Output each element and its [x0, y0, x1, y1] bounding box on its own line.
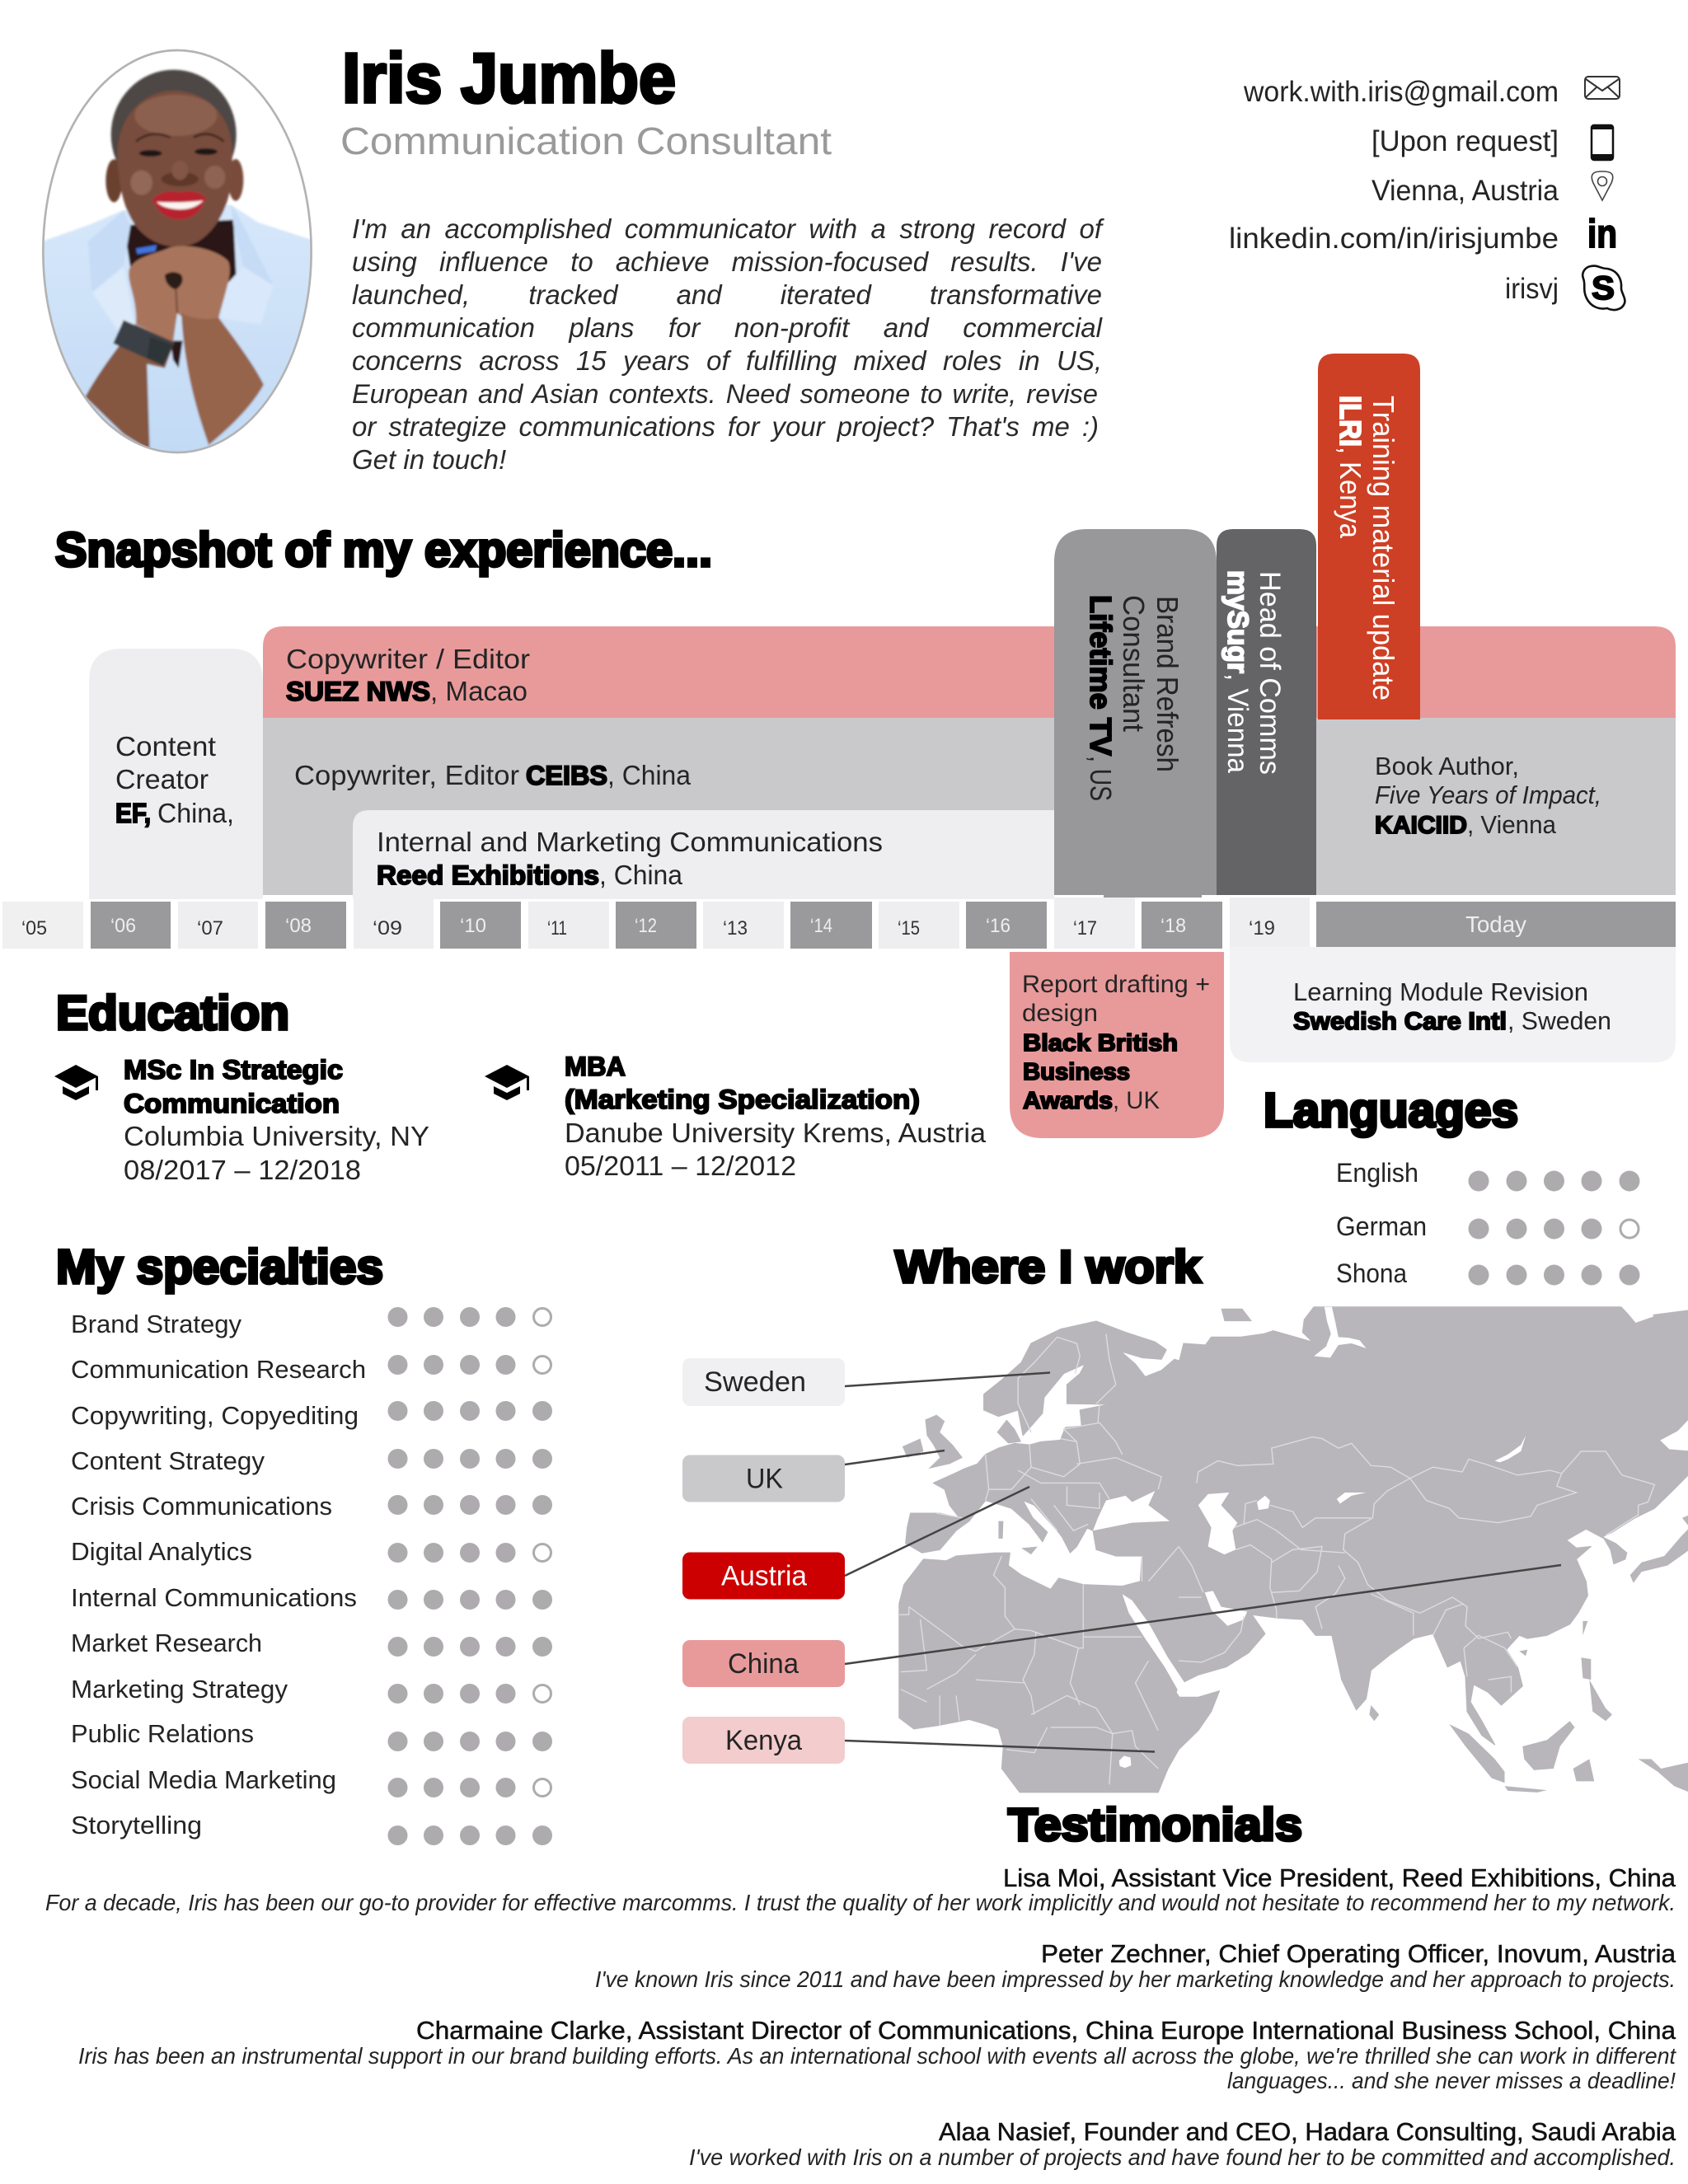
label: Sweden — [682, 1358, 845, 1406]
heading: where I work: Where I work — [895, 1240, 1202, 1292]
label: UK — [682, 1455, 845, 1502]
bar: ILRI: ILRI — [1334, 396, 1367, 447]
heading: snapshot: Snapshot of my experience... — [55, 523, 712, 577]
intro paragraph: Get in touch! — [352, 444, 506, 475]
label: China: China — [728, 1648, 799, 1680]
bar: Reed Exhibitions: Internal and Marketing Communications — [377, 827, 883, 857]
bar: Lifetime TV: Brand Refresh — [1151, 596, 1184, 772]
label: Kenya — [682, 1717, 845, 1764]
bar: Black British Business Awards: design — [1022, 1000, 1098, 1027]
bar: Book Author, KAICIID: Book Author, — [1375, 752, 1519, 780]
icon: skype — [1582, 266, 1625, 310]
specialties list: Internal Communications — [71, 1583, 357, 1612]
year axis: ‘11 — [547, 917, 567, 940]
year axis: ‘13 — [723, 917, 748, 940]
bar: SUEZ NWS: , Macao — [430, 676, 528, 706]
bar: Lifetime TV: , US — [1084, 756, 1118, 801]
contact details — [1229, 76, 1559, 305]
bar: CEIBS: CEIBS — [526, 761, 607, 790]
year axis: ‘12 — [635, 915, 657, 937]
education: MSc: Communication — [124, 1089, 340, 1118]
bar: SUEZ NWS: SUEZ NWS — [286, 677, 430, 706]
year axis: ‘10 — [460, 915, 486, 937]
testimonial: Alaa Nasief: I've worked with Iris on a number of projects and have found her to be committed and accomplished. — [689, 2144, 1676, 2170]
bar: ILRI: , Kenya — [1334, 447, 1367, 539]
education: MSc: 08/2017 – 12/2018 — [124, 1155, 361, 1185]
specialties list: Market Research — [71, 1629, 262, 1657]
contact details: work.with.iris@gmail.com — [1243, 76, 1559, 108]
bar: Reed Exhibitions — [353, 810, 1054, 899]
year axis: ‘16 — [986, 915, 1010, 937]
icon: location pin — [1592, 171, 1613, 200]
year axis: ‘15 — [898, 917, 920, 940]
bar: Swedish Care Intl: Swedish Care Intl — [1293, 1008, 1507, 1035]
bar: Swedish Care Intl: Learning Module Revision — [1293, 977, 1588, 1006]
bar: ILRI: Training material update — [1367, 396, 1400, 701]
label: Kenya: Kenya — [725, 1725, 802, 1756]
bar: mySugr: Head of Comms — [1254, 571, 1286, 775]
bar: Black British Business Awards: Awards — [1023, 1088, 1113, 1114]
education: MSc: Columbia University, NY — [124, 1121, 429, 1151]
year axis: Today — [1465, 912, 1526, 937]
intro paragraph: launched, tracked and iterated transformative — [352, 279, 1102, 310]
icon: linkedin: in — [1587, 213, 1617, 256]
testimonial: Charmaine Clarke — [78, 2016, 1676, 2093]
intro paragraph: European and Asian contexts. Need someone to write, revise — [352, 379, 1098, 409]
icon: graduation cap — [54, 1065, 98, 1100]
year axis: ‘18 — [1160, 915, 1186, 937]
bar: CEIBS — [263, 718, 1676, 895]
bar: Book Author, KAICIID: Five Years of Impact, — [1375, 780, 1601, 809]
testimonial: Alaa Nasief: Alaa Nasief, Founder and CEO, Hadara Consulting, Saudi Arabia — [939, 2117, 1676, 2146]
contact details: [Upon request] — [1372, 125, 1559, 157]
contact details: irisvj — [1505, 273, 1559, 305]
bar: mySugr: , Vienna — [1221, 673, 1254, 773]
bar: Content Creator, EF: Creator — [115, 764, 209, 794]
testimonial: Peter Zechner — [595, 1939, 1676, 1992]
label: Austria: Austria — [721, 1561, 807, 1592]
specialties list: Copywriting, Copyediting — [71, 1401, 359, 1430]
year axis: ‘08 — [285, 915, 312, 937]
bar: CEIBS: Copywriter, Editor — [294, 760, 519, 790]
intro paragraph: I'm an accomplished communicator with a strong record of — [352, 213, 1102, 244]
specialties list: Digital Analytics — [71, 1537, 252, 1566]
bar: Content Creator, EF: Content — [115, 731, 216, 762]
bar: Content Creator, EF — [89, 649, 263, 899]
heading: my specialties: My specialties — [56, 1240, 383, 1294]
year axis — [2, 898, 1676, 949]
specialties list: Storytelling — [71, 1811, 202, 1840]
bar: Lifetime TV: Lifetime TV — [1084, 595, 1118, 756]
icon: skype: S — [1592, 270, 1615, 307]
bar: Black British Business Awards: Business — [1023, 1059, 1130, 1085]
bar: SUEZ NWS: Copywriter / Editor — [286, 644, 530, 674]
bar: Black British Business Awards — [1010, 952, 1224, 1138]
bar: Reed Exhibitions: Reed Exhibitions — [377, 860, 599, 890]
specialties list: Crisis Communications — [71, 1492, 332, 1521]
heading: languages: Languages — [1264, 1084, 1518, 1137]
portrait photo — [41, 49, 313, 453]
year axis: ‘09 — [373, 917, 402, 940]
label: Sweden: Sweden — [704, 1366, 806, 1398]
languages list — [1336, 1158, 1640, 1288]
bar: Content Creator, EF: EF, — [115, 798, 151, 828]
icon: phone — [1592, 125, 1613, 160]
bar: Content Creator, EF: China, — [157, 798, 234, 828]
timeline chart — [2, 354, 1676, 1138]
label: China — [682, 1640, 845, 1687]
bar: Lifetime TV: Consultant — [1117, 595, 1151, 732]
bar: Swedish Care Intl — [1230, 947, 1676, 1062]
bar: Black British Business Awards: Report drafting + — [1022, 971, 1210, 998]
specialties list: Communication Research — [71, 1355, 366, 1384]
languages list: English — [1336, 1158, 1418, 1188]
bar: mySugr: mySugr — [1221, 570, 1254, 673]
specialties list: Brand Strategy — [71, 1310, 241, 1338]
icon: graduation cap — [485, 1065, 529, 1100]
bar: Book Author, KAICIID — [1375, 752, 1601, 839]
specialties list: Social Media Marketing — [71, 1765, 336, 1794]
callout lines — [845, 1373, 1561, 1752]
education: MBA: (Marketing Specialization) — [565, 1085, 920, 1114]
bar: Swedish Care Intl: , Sweden — [1507, 1006, 1611, 1035]
title: name: Iris Jumbe — [342, 40, 676, 118]
intro paragraph: concerns across 15 years of fulfilling mixed roles in US, — [352, 345, 1102, 376]
testimonial: Lisa Moi — [45, 1863, 1676, 1915]
heading: education: Education — [56, 987, 289, 1040]
education: MSc: MSc In Strategic — [124, 1055, 343, 1085]
label: UK: UK — [746, 1464, 783, 1495]
languages list: Shona — [1336, 1258, 1407, 1288]
bar: Lifetime TV — [1054, 529, 1217, 898]
intro paragraph — [352, 213, 1104, 475]
intro paragraph: or strategize communications for your project? That's me :) — [352, 411, 1099, 442]
icon: mail — [1585, 77, 1620, 99]
intro paragraph: communication plans for non-profit and commercial — [352, 312, 1102, 343]
bar: Reed Exhibitions: , China — [599, 860, 683, 890]
contact details: Vienna, Austria — [1372, 175, 1559, 207]
specialties list: Public Relations — [71, 1719, 254, 1748]
testimonial: Peter Zechner: Peter Zechner, Chief Operating Officer, Inovum, Austria — [1041, 1939, 1676, 1968]
education: MBA: Danube University Krems, Austria — [565, 1118, 987, 1148]
contact details: linkedin.com/in/irisjumbe — [1229, 223, 1559, 255]
education: MBA: MBA — [565, 1052, 626, 1081]
languages list: German — [1336, 1212, 1427, 1241]
subtitle: role: Communication Consultant — [340, 120, 832, 162]
year axis: ‘17 — [1073, 917, 1097, 940]
specialties list: Content Strategy — [71, 1446, 265, 1475]
bar: CEIBS: , China — [607, 760, 692, 790]
heading: testimonials: Testimonials — [1008, 1798, 1302, 1850]
year axis: ‘06 — [110, 915, 136, 937]
year axis: ‘05 — [21, 917, 47, 940]
bar: SUEZ NWS — [263, 626, 1676, 718]
bar: mySugr — [1217, 529, 1316, 895]
bar: Book Author, KAICIID: KAICIID — [1375, 812, 1467, 839]
bar: Book Author, KAICIID: , Vienna — [1467, 810, 1557, 839]
bar: Black British Business Awards: , UK — [1113, 1087, 1160, 1114]
specialties list — [71, 1307, 552, 1845]
label: Austria — [682, 1553, 845, 1599]
year axis: ‘19 — [1249, 917, 1275, 940]
education: MBA: 05/2011 – 12/2012 — [565, 1151, 796, 1181]
year axis: ‘14 — [810, 915, 832, 937]
year axis: ‘07 — [197, 917, 223, 940]
specialties list: Marketing Strategy — [71, 1675, 288, 1704]
education: MBA — [565, 1052, 987, 1181]
bar: ILRI — [1318, 354, 1420, 719]
education: MSc — [124, 1055, 429, 1185]
testimonial: Lisa Moi: Lisa Moi, Assistant Vice President, Reed Exhibitions, China — [1003, 1863, 1676, 1892]
intro paragraph: using influence to achieve mission-focused results. I've — [352, 246, 1102, 277]
bar: Black British Business Awards: Black British — [1023, 1030, 1178, 1057]
map: Europe, Africa and Asia — [899, 1307, 1688, 1793]
testimonial: Charmaine Clarke: Charmaine Clarke, Assistant Director of Communications, China Europe International Business School, China — [416, 2016, 1676, 2045]
testimonial: Alaa Nasief — [689, 2117, 1676, 2170]
